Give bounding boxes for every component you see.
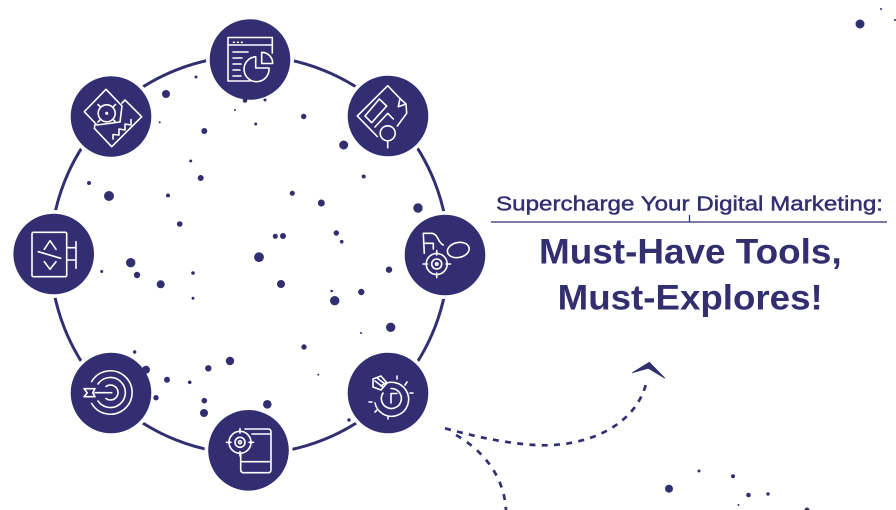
divider under subtitle — [491, 215, 887, 222]
arrow: dashed curve pointing up to the heading — [445, 362, 665, 445]
panel: bottom-left tool, bullseye — [67, 349, 155, 437]
icon: document and magnifier — [357, 86, 407, 148]
panel: bottom-right tool, stopwatch with grenade — [344, 349, 432, 437]
subtitle: Supercharge Your Digital Marketing: — [496, 193, 883, 216]
panel: top tool, browser with pie chart — [206, 16, 294, 104]
scattered dots, top right corner — [856, 8, 896, 28]
icon: phone and crosshair — [226, 428, 271, 473]
panel: bottom tool, mobile with target — [204, 406, 292, 494]
icon: screen with arrows — [32, 232, 76, 277]
icon: timer with rays — [369, 376, 413, 419]
ring connecting the tools — [50, 56, 448, 454]
heading — [539, 232, 842, 317]
icon: target with funnel shapes — [423, 233, 471, 278]
scattered dots inside the ring — [87, 76, 423, 422]
icon: stacked cards with target — [84, 89, 142, 147]
panel: left tool, split screen — [10, 210, 98, 298]
heading: Must-Have Tools, — [539, 232, 842, 271]
heading: Must-Explores! — [558, 278, 823, 317]
panel: top-left tool, cards with target — [67, 72, 155, 160]
icon: browser window and pie chart — [228, 38, 273, 82]
arrow: dashed curve leaving the page bottom — [456, 435, 506, 510]
panel: top-right tool, document with magnifier — [344, 72, 432, 160]
panel: right tool, target and shapes — [401, 211, 489, 299]
scattered dots, bottom right — [665, 470, 810, 510]
icon: bullseye with arrow — [84, 371, 132, 414]
